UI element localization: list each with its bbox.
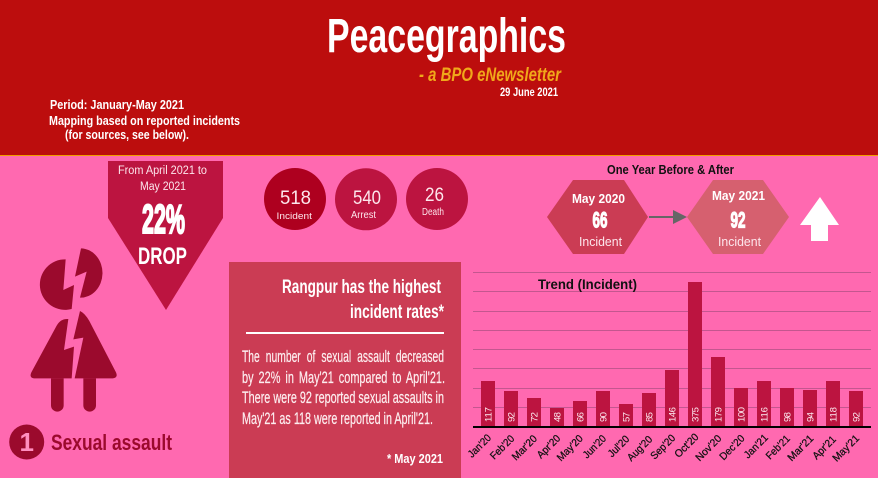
stat: incident: Incident	[276, 211, 312, 222]
month axis labels: Oct'20	[672, 431, 702, 460]
stat: death	[406, 168, 468, 230]
period text: Period: January-May 2021	[50, 98, 184, 112]
chart title: Trend (Incident)	[538, 277, 637, 292]
bar value labels: 116	[760, 407, 770, 422]
month axis labels: Apr'21	[810, 433, 839, 462]
month axis labels: Jun'20	[581, 433, 609, 461]
hexagon: May 2020: May 2020	[572, 192, 625, 206]
month axis labels: Jan'21	[742, 432, 771, 461]
title: Peacegraphics	[327, 10, 566, 63]
month axis labels: Nov'20	[693, 433, 724, 464]
bar value labels: 179	[714, 407, 724, 422]
bar value labels: 118	[828, 407, 840, 422]
date: 29 June 2021	[500, 85, 558, 99]
bar value labels: 146	[668, 407, 678, 422]
drop banner	[108, 161, 223, 310]
hexagon: May 2021: Incident	[718, 234, 761, 249]
hexagon: May 2020: 66	[592, 208, 608, 232]
panel heading: incident rates*	[350, 302, 444, 323]
panel body text: May'21 as 118 were reported in April'21.	[242, 410, 433, 428]
bar chart: trend of incidents	[466, 272, 871, 464]
month axis labels: Jul'20	[606, 433, 632, 460]
month axis labels: Mar'20	[510, 433, 540, 463]
bar value labels: 90	[598, 412, 610, 422]
stat: death: 26	[425, 185, 444, 206]
mapping note	[49, 114, 240, 142]
bar value labels: 92	[852, 412, 862, 422]
panel body text: The number of sexual assault decreased	[242, 348, 444, 366]
month axis labels: Dec'20	[717, 433, 748, 463]
icon: up arrow	[800, 197, 839, 241]
month axis labels: May'21	[830, 432, 862, 464]
stat: death: Death	[422, 207, 444, 218]
bar value labels: 92	[506, 412, 518, 422]
panel heading	[282, 277, 444, 323]
month axis labels	[466, 431, 862, 464]
stat: incident: 518	[280, 188, 311, 209]
hexagon: May 2021: May 2021	[712, 189, 765, 203]
banner period text: May 2021	[140, 181, 186, 193]
icon: broken woman figure	[31, 248, 117, 412]
month axis labels: Feb'21	[764, 433, 793, 462]
bar value labels: 48	[552, 412, 564, 422]
drop label: DROP	[138, 243, 187, 270]
stat: arrest: Arrest	[351, 210, 376, 221]
month axis labels: Sep'20	[648, 432, 678, 462]
hexagon: May 2021	[687, 180, 789, 254]
category label: Sexual assault	[51, 430, 173, 455]
category label	[9, 424, 173, 460]
bar value labels: 375	[690, 407, 702, 422]
panel heading: Rangpur has the highest	[282, 277, 441, 298]
panel body text	[242, 348, 445, 428]
banner period text: From April 2021 to	[118, 165, 207, 177]
subtitle: - a BPO eNewsletter	[419, 65, 562, 86]
category label: 1	[19, 427, 34, 457]
banner period text	[118, 165, 207, 193]
month axis labels: Mar'21	[785, 433, 816, 464]
22% figure: 22%	[142, 196, 185, 242]
bars	[481, 282, 863, 426]
hexagon: May 2020: Incident	[579, 234, 622, 249]
bar value labels: 85	[644, 412, 656, 422]
bar value labels: 66	[576, 412, 586, 422]
panel body text: There were 92 reported sexual assaults in	[242, 389, 444, 407]
panel footnote: * May 2021	[387, 451, 443, 466]
mapping note: (for sources, see below).	[65, 128, 189, 142]
arrow: year comparison	[649, 210, 687, 224]
bar value labels: 94	[806, 411, 816, 422]
bar value labels: 117	[484, 407, 494, 422]
hexagon: May 2021: 92	[730, 208, 746, 232]
bar value labels: 72	[530, 412, 540, 422]
month axis labels: Feb'20	[488, 433, 517, 462]
comparison heading: One Year Before & After	[607, 163, 734, 177]
stat: incident	[264, 168, 326, 230]
panel: Rangpur summary	[229, 262, 461, 478]
panel body text: by 22% in May'21 compared to April'21.	[242, 369, 445, 387]
bar value labels: 100	[736, 407, 748, 422]
mapping note: Mapping based on reported incidents	[49, 114, 240, 128]
bar value labels: 57	[622, 412, 632, 422]
month axis labels: May'20	[555, 433, 586, 464]
bar value labels	[484, 407, 862, 422]
hexagon: May 2020	[547, 180, 648, 254]
stat: arrest: 540	[353, 188, 381, 209]
stat: arrest	[335, 168, 397, 230]
month axis labels: Apr'20	[535, 433, 563, 461]
month axis labels: Aug'20	[625, 434, 655, 464]
bar value labels: 98	[782, 412, 794, 422]
header band	[0, 0, 878, 156]
month axis labels: Jan'20	[466, 432, 494, 460]
